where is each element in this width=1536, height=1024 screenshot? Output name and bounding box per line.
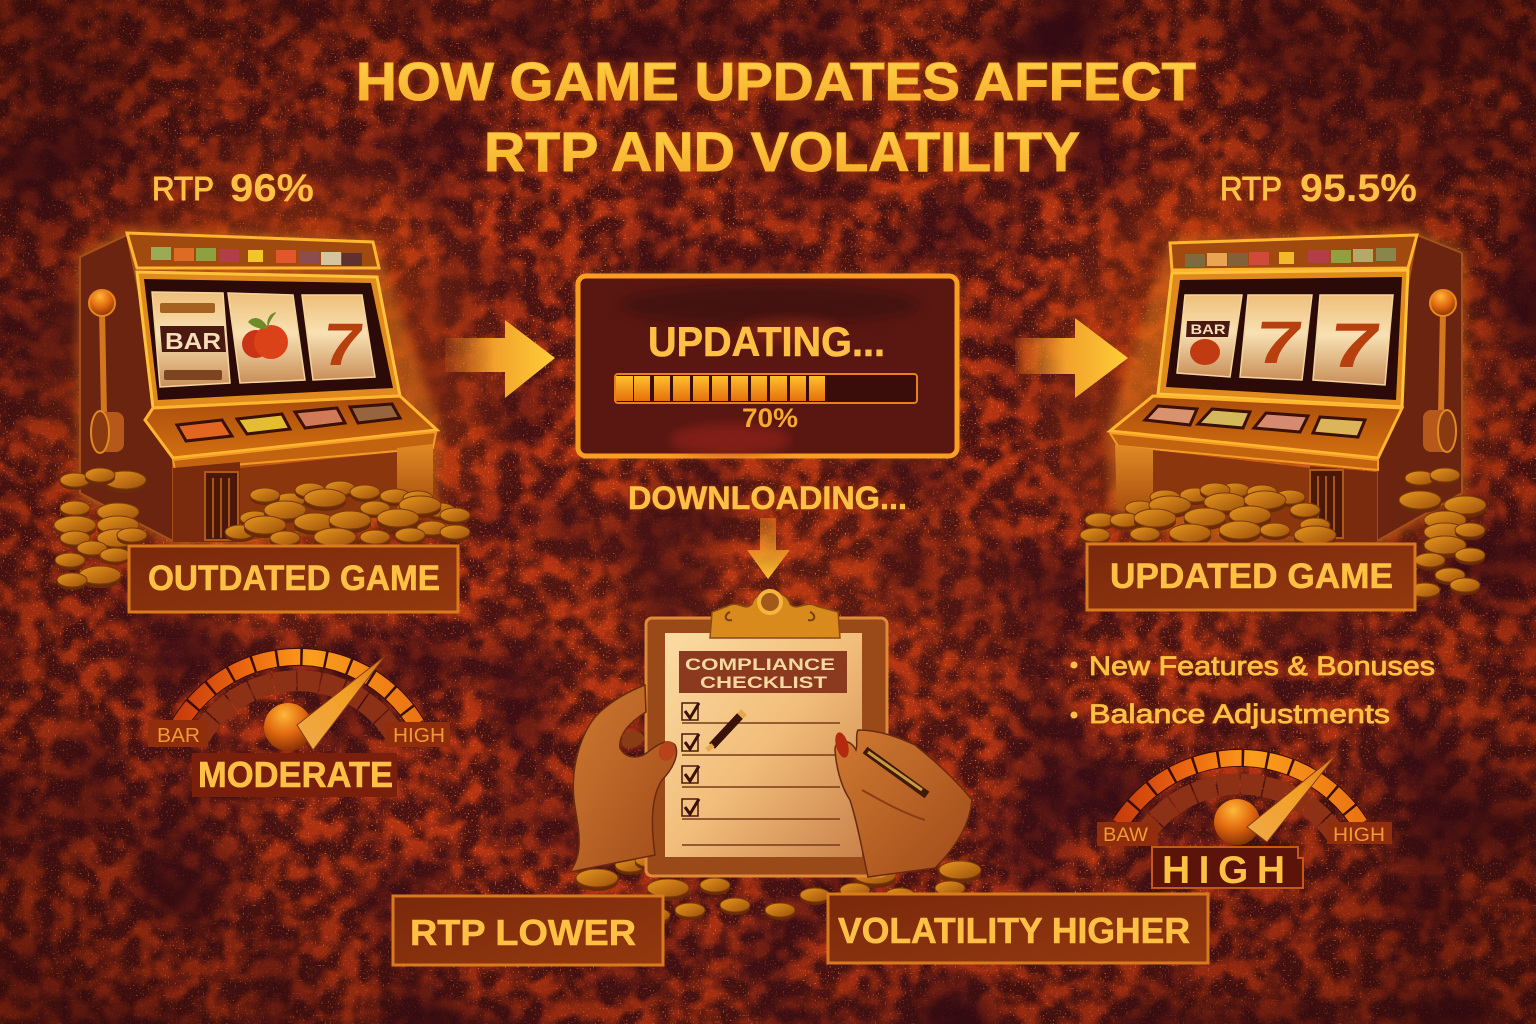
arrow: to updated game — [1015, 318, 1128, 398]
slot machine: updated game: 7 — [1251, 309, 1307, 376]
high label: HIGH — [393, 725, 445, 747]
coin pile: updated game — [1080, 468, 1486, 600]
gauge: high volatility — [1097, 754, 1392, 892]
coin pile: outdated game — [54, 468, 470, 590]
checklist header — [679, 651, 847, 693]
banner: outdated game: OUTDATED GAME — [148, 559, 440, 598]
high side label: HIGH — [1333, 825, 1385, 846]
RTP 95.5% label: 95.5% — [1300, 167, 1417, 210]
banner: updated game: UPDATED GAME — [1110, 557, 1393, 596]
banner: volatility higher: VOLATILITY HIGHER — [838, 910, 1190, 951]
panel: updating progress: UPDATING... — [648, 318, 885, 365]
clipboard with compliance checklist — [570, 591, 972, 877]
coins around clipboard — [576, 853, 981, 925]
pencil — [707, 712, 744, 750]
RTP 95.5% label — [1220, 167, 1417, 210]
progress bar — [615, 374, 917, 403]
banner: volatility higher — [828, 894, 1208, 963]
banner: RTP lower — [393, 896, 663, 965]
high label: HIGH — [1162, 849, 1285, 892]
panel: updating progress — [578, 276, 957, 456]
slot machine: outdated game — [78, 228, 442, 545]
moderate label: MODERATE — [198, 754, 393, 795]
baw label — [1097, 822, 1158, 846]
slot machine: updated game: BAR — [1190, 321, 1226, 337]
banner: updated game — [1087, 544, 1415, 610]
RTP 96% label — [152, 167, 314, 210]
low label — [148, 720, 208, 747]
gauge: moderate volatility — [148, 656, 450, 797]
right hand with pen — [833, 730, 972, 877]
title — [356, 52, 1196, 183]
RTP 95.5% label: RTP — [1220, 170, 1282, 207]
title: HOW GAME UPDATES AFFECT — [356, 52, 1196, 112]
slot machine: updated game — [1107, 230, 1465, 545]
left hand — [570, 685, 678, 872]
high label — [385, 722, 450, 747]
RTP 96% label: RTP — [152, 170, 214, 207]
checklist header: CHECKLIST — [700, 673, 828, 692]
clip — [710, 591, 840, 638]
feature bullet list — [1070, 651, 1435, 729]
checklist header: COMPLIANCE — [685, 655, 835, 674]
arrow: to update panel — [445, 320, 555, 398]
baw label: BAW — [1103, 825, 1148, 846]
panel: updating progress: 70% — [742, 403, 798, 433]
banner: outdated game — [129, 546, 458, 612]
high side label — [1327, 822, 1392, 846]
slot machine: updated game: 7 — [1325, 310, 1385, 381]
title: RTP AND VOLATILITY — [484, 120, 1080, 183]
downloading label: DOWNLOADING... — [628, 480, 907, 516]
feature bullet list: New Features & Bonuses — [1089, 651, 1435, 681]
checklist rows — [682, 703, 840, 845]
slot machine: outdated game: 7 — [318, 312, 367, 379]
low label: BAR — [157, 725, 200, 747]
arrow: down to checklist — [747, 518, 790, 579]
RTP 96% label: 96% — [230, 167, 314, 210]
banner: RTP lower: RTP LOWER — [410, 912, 636, 953]
feature bullet list: Balance Adjustments — [1089, 699, 1390, 729]
slot machine: outdated game: BAR — [165, 328, 221, 354]
